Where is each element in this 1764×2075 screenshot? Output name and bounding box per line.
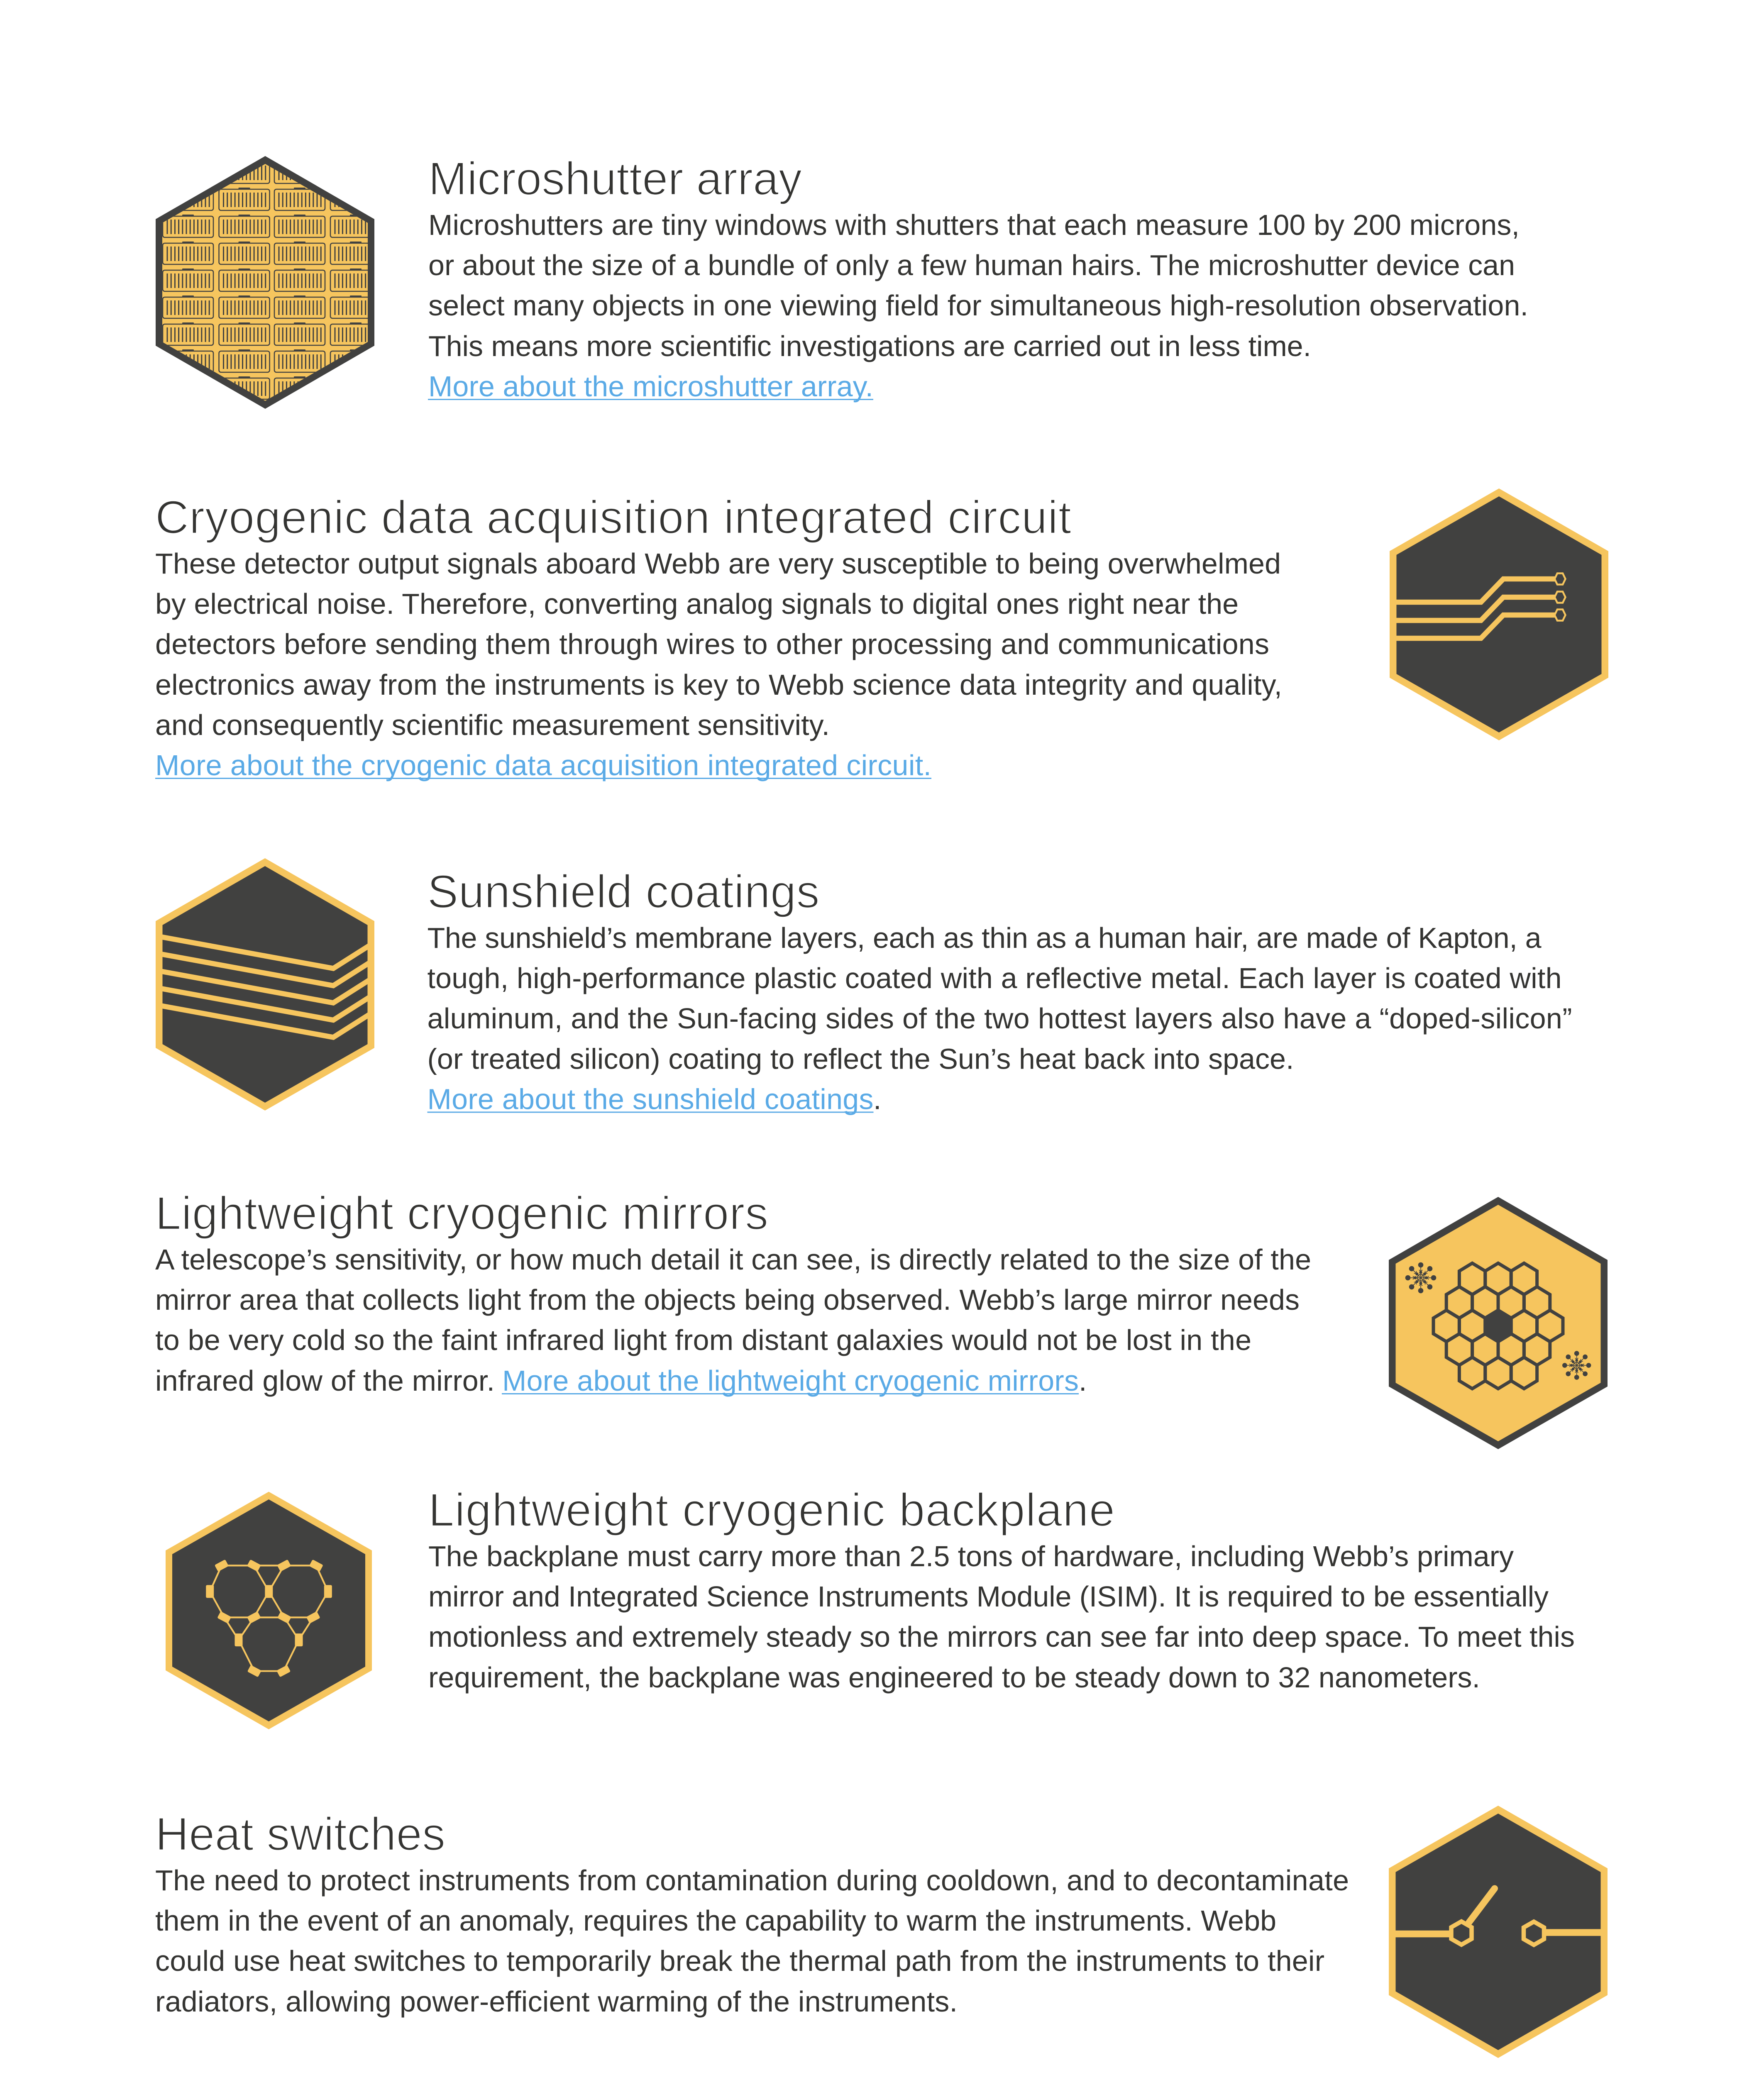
text block: cryogenic circuit description: More about the cryogenic data acquisition integrated circuit. — [155, 749, 931, 781]
heading: lightweight cryogenic backplane: Lightweight cryogenic backplane — [428, 1484, 1115, 1536]
text block: heat switches description — [155, 1864, 1349, 2018]
heading: microshutter array: Microshutter array — [428, 153, 802, 205]
panel: lightweight cryogenic mirrors — [155, 1187, 1608, 1449]
text block: mirrors description: . — [1079, 1365, 1087, 1397]
text block: sunshield description: aluminum, and the Sun-facing sides of the two hottest layers also have a “doped-silicon” — [428, 1002, 1572, 1035]
text block: cryogenic circuit description: electronics away from the instruments is key to Webb science data integrity and quality, — [155, 669, 1282, 701]
text block: backplane description: requirement, the backplane was engineered to be steady down to 32 nanometers. — [428, 1661, 1480, 1694]
text block: sunshield description: . — [873, 1083, 881, 1116]
text block: microshutter description: Microshutters are tiny windows with shutters that each measure 100 by 200 microns, — [428, 209, 1520, 241]
text block: mirrors description: mirror area that collects light from the objects being observed. Webb’s large mirror needs — [155, 1284, 1300, 1316]
text block: backplane description: The backplane must carry more than 2.5 tons of hardware, including Webb’s primary — [428, 1540, 1514, 1572]
text block: cryogenic circuit description: and consequently scientific measurement sensitivity. — [155, 709, 830, 741]
text block: cryogenic circuit description: These detector output signals aboard Webb are very susceptible to being overwhelmed — [155, 547, 1281, 580]
icon: microshutter hexagon — [156, 156, 381, 409]
text block: microshutter description: This means more scientific investigations are carried out in less time. — [428, 330, 1311, 362]
text block: microshutter description: or about the size of a bundle of only a few human hairs. The microshutter device can — [428, 249, 1515, 281]
icon: circuit traces hexagon — [1390, 488, 1608, 740]
text block: heat switches description: The need to protect instruments from contamination during cooldown, and to decontaminate — [155, 1864, 1349, 1897]
text block: mirrors description: More about the lightweight cryogenic mirrors — [502, 1365, 1079, 1397]
icon: backplane hexagon — [166, 1492, 372, 1729]
text block: heat switches description: radiators, allowing power-efficient warming of the instruments. — [155, 1985, 958, 2018]
text block: heat switches description: could use heat switches to temporarily break the thermal path from the instruments to their — [155, 1945, 1324, 1977]
heading: lightweight cryogenic mirrors: Lightweight cryogenic mirrors — [155, 1187, 768, 1239]
text block: mirrors description: to be very cold so the faint infrared light from distant galaxies would not be lost in the — [155, 1324, 1251, 1356]
text block: cryogenic circuit description — [155, 547, 1282, 781]
icon: segmented mirror hexagon with snowflakes — [1389, 1197, 1608, 1449]
panel: cryogenic data acquisition integrated circuit — [155, 488, 1608, 781]
heading: cryogenic circuit: Cryogenic data acquisition integrated circuit — [155, 491, 1071, 543]
heading: sunshield coatings: Sunshield coatings — [428, 866, 819, 918]
icon: heat switch hexagon — [1389, 1806, 1608, 2058]
text block: mirrors description: A telescope’s sensitivity, or how much detail it can see, is directly related to the size of the — [155, 1243, 1311, 1276]
panel: sunshield coatings — [156, 858, 1572, 1116]
panel: microshutter array — [156, 153, 1528, 409]
text block: mirrors description — [155, 1243, 1311, 1397]
text block: backplane description: mirror and Integrated Science Instruments Module (ISIM). It is required to be essentially — [428, 1580, 1549, 1613]
text block: sunshield description — [428, 922, 1572, 1116]
icon: sunshield layers hexagon — [156, 858, 374, 1111]
text block: mirrors description: infrared glow of the mirror. — [155, 1365, 495, 1397]
text block: backplane description: motionless and extremely steady so the mirrors can see far into deep space. To meet this — [428, 1621, 1575, 1653]
text block: sunshield description: (or treated silicon) coating to reflect the Sun’s heat back into space. — [428, 1042, 1294, 1075]
text block: sunshield description: The sunshield’s membrane layers, each as thin as a human hair, are made of Kapton, a — [428, 922, 1542, 954]
text block: sunshield description: More about the sunshield coatings — [428, 1083, 873, 1116]
text block: cryogenic circuit description: detectors before sending them through wires to other processing and communications — [155, 628, 1269, 660]
text block: microshutter description: More about the microshutter array. — [428, 370, 873, 403]
panel: heat switches — [155, 1806, 1608, 2058]
heading: heat switches: Heat switches — [155, 1808, 445, 1860]
text block: heat switches description: them in the event of an anomaly, requires the capability to warm the instruments. Webb — [155, 1904, 1276, 1937]
panel: lightweight cryogenic backplane — [166, 1484, 1575, 1729]
text block: microshutter description — [428, 209, 1528, 403]
text block: microshutter description: select many objects in one viewing field for simultaneous high-resolution observation. — [428, 289, 1528, 322]
text block: sunshield description: tough, high-performance plastic coated with a reflective metal. Each layer is coated with — [428, 962, 1561, 994]
text block: cryogenic circuit description: by electrical noise. Therefore, converting analog signals to digital ones right near the — [155, 588, 1239, 620]
text block: backplane description — [428, 1540, 1575, 1694]
